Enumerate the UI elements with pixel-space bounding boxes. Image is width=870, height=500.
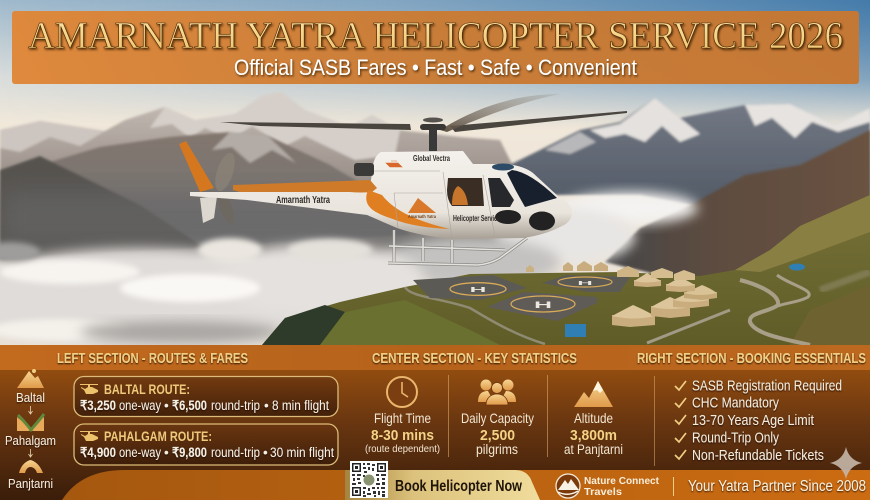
- right section: [637, 350, 866, 466]
- helipad 3: H: [577, 280, 593, 286]
- stat: daily capacity: [461, 380, 534, 457]
- helipad 1: H: [470, 286, 486, 294]
- fares: Pahalgam: one-way: [119, 445, 161, 460]
- door panel lines: [374, 171, 495, 238]
- engine exhaust: [354, 163, 374, 176]
- fares: Pahalgam: ₹9,800: [172, 445, 207, 460]
- stat: altitude: [564, 381, 623, 457]
- helipad 2: H: [534, 300, 552, 310]
- icon: helicopter: [80, 431, 98, 441]
- title: AMARNATH YATRA HELICOPTER SERVICE 2026: [28, 15, 843, 57]
- icon: clock: [387, 377, 417, 407]
- icon: Panjtarni tent: [19, 460, 43, 473]
- background: dark right mountain: [605, 130, 870, 290]
- helipad 2: [487, 292, 597, 321]
- stat: flight time: Flight Time: [374, 410, 431, 426]
- stat: daily capacity: pilgrims: [476, 442, 518, 457]
- fares: Pahalgam: round-trip: [211, 445, 260, 460]
- stat: flight time: (route dependent): [365, 443, 440, 455]
- fuselage: [190, 151, 572, 239]
- background: distant snowy mountains: [0, 92, 520, 260]
- fares: Baltal: •: [264, 398, 269, 413]
- route path: icons and stops: [5, 369, 56, 491]
- card: Baltal route: BALTAL ROUTE:: [104, 381, 190, 397]
- stat: altitude: at Panjtarni: [564, 442, 623, 457]
- stat: daily capacity: Daily Capacity: [461, 410, 534, 426]
- fares: Pahalgam: 30 min flight: [270, 445, 334, 460]
- fuselage text: Amarnath Yatra: [408, 214, 436, 219]
- center section: [365, 350, 623, 457]
- button: book helicopter: [345, 470, 540, 500]
- label: Panjtarni: Panjtarni: [8, 476, 53, 491]
- label: Baltal: Baltal: [16, 390, 45, 405]
- fares: Pahalgam: [80, 445, 334, 460]
- background: sky: [0, 0, 870, 345]
- title banner: [12, 11, 859, 84]
- main rotor: [220, 94, 627, 151]
- background: clouds: [0, 190, 698, 348]
- stat: altitude: 3,800m: [570, 427, 617, 444]
- checklist: 13-70 Years Age Limit: [692, 412, 815, 429]
- sparkle mark: [830, 447, 862, 479]
- helipad 1: [413, 275, 527, 300]
- logo: Nature Connect Travels: Nature Connect: [584, 476, 660, 487]
- fuselage text: Global Vectra: [413, 154, 450, 163]
- tail fin and rotor: [179, 141, 239, 226]
- icon: Baltal mountain: [17, 369, 44, 388]
- stat: flight time: 8-30 mins: [371, 427, 434, 444]
- icon: people: [478, 380, 516, 405]
- fares: Baltal: one-way: [119, 398, 161, 413]
- checklist: Round-Trip Only: [692, 430, 779, 446]
- checklist: CHC Mandatory: [692, 394, 779, 412]
- icon: mountain: [574, 381, 613, 407]
- background: foreground hillside: [262, 195, 870, 345]
- fares: Pahalgam: •: [164, 445, 169, 460]
- orange tail boom stripe: [233, 180, 377, 192]
- fuselage text: [276, 154, 500, 223]
- fares: Baltal: round-trip: [211, 398, 260, 413]
- arrow: Pahalgam to Panjtarni: [28, 449, 32, 457]
- fares: Baltal: 8 min flight: [272, 398, 329, 413]
- logo: Nature Connect Travels: [556, 474, 660, 498]
- fares: Baltal: •: [164, 398, 169, 413]
- card: Baltal route: [74, 376, 338, 416]
- arrow: Baltal to Pahalgam: [28, 406, 32, 414]
- windows: [447, 164, 557, 230]
- fares: Baltal: ₹3,250: [80, 398, 116, 413]
- background: right snowy range: [495, 98, 870, 240]
- fares: Baltal: ₹6,500: [172, 398, 207, 413]
- landing skids: [388, 230, 527, 265]
- stat: flight time: [365, 377, 440, 455]
- background: hazy mid mountains left: [0, 132, 410, 258]
- logo: Nature Connect Travels: Travels: [584, 487, 622, 498]
- stat: altitude: Altitude: [574, 410, 613, 426]
- checklist: [675, 378, 842, 464]
- fuselage text: Amarnath Yatra: [276, 195, 330, 206]
- fares: Baltal: [80, 398, 329, 413]
- center heading: CENTER SECTION - KEY STATISTICS: [372, 350, 577, 367]
- check icons: [675, 381, 686, 459]
- icon: helicopter: [80, 384, 98, 394]
- card: Pahalgam route: [74, 424, 338, 465]
- fares: Pahalgam: ₹4,900: [80, 445, 116, 460]
- orange swoosh: [366, 190, 450, 229]
- label: Pahalgam: Pahalgam: [5, 433, 56, 448]
- left section: [5, 350, 338, 491]
- footer call to action: [345, 461, 866, 500]
- stat: daily capacity: 2,500: [480, 427, 515, 444]
- QR code: [350, 461, 388, 498]
- fares: Pahalgam: •: [263, 445, 268, 460]
- helipads: [413, 275, 630, 321]
- helicopter: [179, 94, 627, 265]
- camp tents: [526, 261, 805, 337]
- subtitle: Official SASB Fares • Fast • Safe • Convenient: [234, 55, 637, 80]
- checklist: Non-Refundable Tickets: [692, 447, 824, 464]
- bottom info panel background: [0, 345, 870, 500]
- button: book helicopter: Book Helicopter Now: [395, 478, 523, 495]
- left heading: LEFT SECTION - ROUTES & FARES: [57, 350, 248, 367]
- card: Pahalgam route: PAHALGAM ROUTE:: [104, 428, 212, 444]
- helipad 3: [542, 275, 630, 292]
- icon: Pahalgam valley: [17, 414, 44, 431]
- fuselage text: Helicopter Service: [453, 213, 500, 223]
